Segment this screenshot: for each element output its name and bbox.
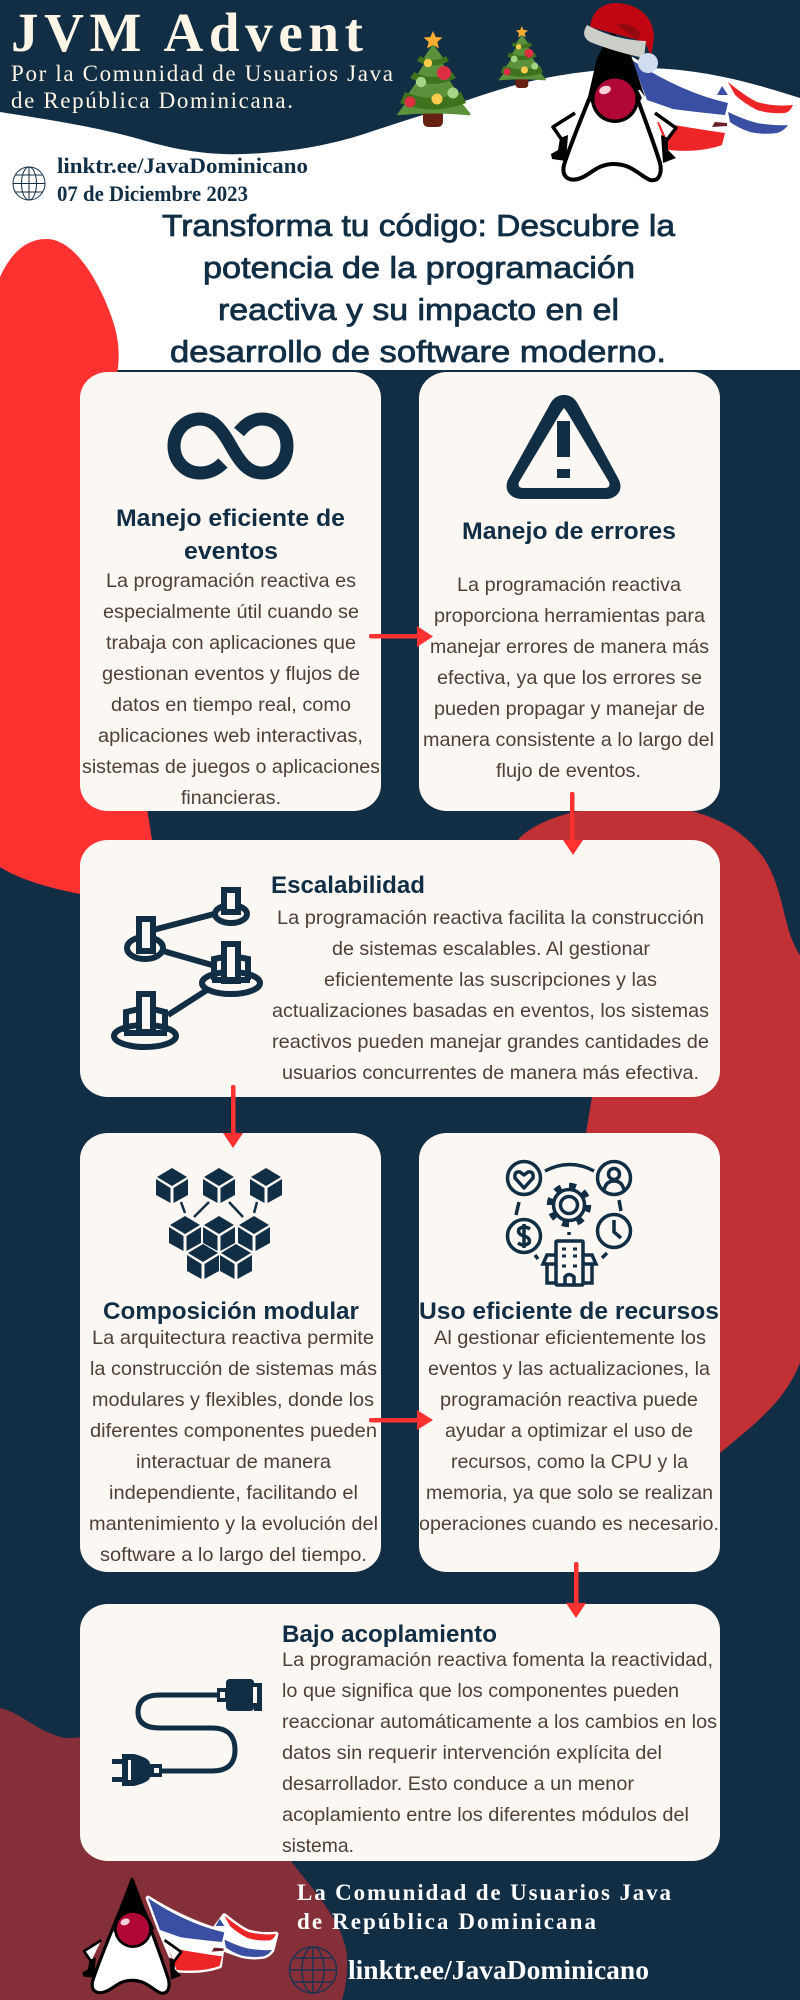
body text: de sistemas escalables. Al gestionar xyxy=(332,938,651,960)
body text: Al gestionar eficientemente los xyxy=(434,1327,706,1349)
icon: globe header xyxy=(13,167,45,200)
body text: lo que significa que los componentes pueden xyxy=(282,1680,679,1702)
footer community text: de República Dominicana xyxy=(297,1909,596,1934)
heading xyxy=(116,505,345,565)
body text: eficientemente las suscripciones y las xyxy=(324,969,657,991)
panel: Manejo de errores xyxy=(419,372,720,811)
panel: Escalabilidad xyxy=(80,840,720,1097)
background blob: maroon bottom-left xyxy=(0,1708,347,2000)
body text: independiente, facilitando el xyxy=(109,1482,358,1504)
body text xyxy=(89,1327,378,1566)
contact info xyxy=(57,153,308,206)
flag xyxy=(632,60,793,151)
body text: mantenimiento y la evolución del xyxy=(89,1513,378,1535)
icon: warning triangle xyxy=(507,395,620,499)
body text: acoplamiento entre los diferentes módulos del xyxy=(282,1804,689,1826)
panel: Bajo acoplamiento xyxy=(80,1604,720,1861)
body text: memoria, ya que solo se realizan xyxy=(426,1482,713,1504)
body text: la construcción de sistemas más xyxy=(90,1358,377,1380)
body text: software a lo largo del tiempo. xyxy=(100,1544,367,1566)
arrow: card 4 to card 5 xyxy=(369,1410,433,1430)
Duke head upper extension xyxy=(588,30,645,97)
subtitle xyxy=(11,61,393,113)
body text: La programación reactiva fomenta la reactividad, xyxy=(282,1649,713,1671)
heading: Composición modular xyxy=(103,1298,359,1325)
footer community text xyxy=(297,1880,672,1934)
body text: operaciones cuando es necesario. xyxy=(419,1513,719,1535)
body text: especialmente útil cuando se xyxy=(103,601,359,623)
subtitle: Por la Comunidad de Usuarios Java xyxy=(11,61,393,86)
body text: ayudar a optimizar el uso de xyxy=(445,1420,693,1442)
heading: eventos xyxy=(184,538,278,565)
contact info: 07 de Diciembre 2023 xyxy=(57,181,248,206)
body text: La programación reactiva es xyxy=(106,570,356,592)
footer community text: La Comunidad de Usuarios Java xyxy=(297,1880,672,1905)
body text: aplicaciones web interactivas, xyxy=(98,725,363,747)
footer link: linktr.ee/JavaDominicano xyxy=(348,1955,649,1985)
icon: resources circle xyxy=(508,1162,630,1285)
heading: Bajo acoplamiento xyxy=(282,1621,497,1648)
panel: Uso eficiente de recursos xyxy=(419,1133,720,1572)
contact info: linktr.ee/JavaDominicano xyxy=(57,153,308,178)
headline xyxy=(162,208,676,369)
body text: datos sin requerir intervención explícita del xyxy=(282,1742,662,1764)
icon: Christmas tree small xyxy=(499,26,546,88)
body text xyxy=(423,574,714,782)
body text: La programación reactiva xyxy=(457,574,681,596)
body text: sistemas de juegos o aplicaciones xyxy=(82,756,380,778)
arrow: card 2 to card 3 xyxy=(563,792,583,855)
icon: Christmas tree large xyxy=(397,31,470,127)
panel: Manejo eficiente de eventos xyxy=(80,372,381,811)
body text: La arquitectura reactiva permite xyxy=(92,1327,374,1349)
body text: La programación reactiva facilita la construcción xyxy=(277,907,704,929)
icon: power cable plug xyxy=(112,1679,262,1786)
headline: reactiva y su impacto en el xyxy=(218,292,619,327)
body text: efectiva, ya que los errores se xyxy=(437,667,702,689)
icon: network of towers xyxy=(114,890,260,1047)
body text: modulares y flexibles, donde los xyxy=(92,1389,374,1411)
arrow: card 1 to card 2 xyxy=(369,626,433,647)
body text: usuarios concurrentes de manera más efectiva. xyxy=(282,1062,699,1084)
main title: JVM Advent: JVM Advent xyxy=(11,2,364,63)
heading: Escalabilidad xyxy=(271,872,425,899)
panel: Composición modular xyxy=(80,1133,381,1572)
Duke xyxy=(82,1879,181,1993)
body text: proporciona herramientas para xyxy=(434,605,705,627)
body text xyxy=(272,907,709,1084)
heading: Uso eficiente de recursos xyxy=(419,1298,719,1325)
icon: infinity xyxy=(174,419,287,473)
background blob: bright red left xyxy=(0,239,155,900)
arrow: card 3 to card 4 xyxy=(223,1085,243,1148)
background blob: dark red right xyxy=(518,805,800,1453)
body text: actualizaciones basadas en eventos, los sistemas xyxy=(272,1000,709,1022)
body text: reactivos pueden manejar grandes cantidades de xyxy=(272,1031,709,1053)
body text: reaccionar automáticamente a los cambios en los xyxy=(282,1711,717,1733)
flag xyxy=(148,1898,276,1971)
body text: gestionan eventos y flujos de xyxy=(102,663,360,685)
body text: diferentes componentes pueden xyxy=(90,1420,377,1442)
body text: manera consistente a lo largo del xyxy=(423,729,714,751)
headline: desarrollo de software moderno. xyxy=(170,334,666,369)
body text: datos en tiempo real, como xyxy=(111,694,351,716)
headline: potencia de la programación xyxy=(203,250,635,285)
body text: desarrollador. Esto conduce a un menor xyxy=(282,1773,635,1795)
nose repaint xyxy=(594,78,636,120)
body text: programación reactiva puede xyxy=(440,1389,698,1411)
body text: manejar errores de manera más xyxy=(430,636,709,658)
body text: interactuar de manera xyxy=(136,1451,331,1473)
heading: Manejo de errores xyxy=(462,518,676,545)
arrow: card 5 to card 6 xyxy=(566,1562,586,1618)
body text xyxy=(82,570,380,809)
body text xyxy=(419,1327,719,1535)
body text: trabaja con aplicaciones que xyxy=(106,632,356,654)
body text: financieras. xyxy=(181,787,281,809)
header white wave xyxy=(0,68,800,370)
headline: Transforma tu código: Descubre la xyxy=(162,208,676,243)
Duke mascot with hat and flag xyxy=(551,3,793,180)
body text: pueden propagar y manejar de xyxy=(434,698,705,720)
body text xyxy=(282,1649,717,1857)
body text: sistema. xyxy=(282,1835,354,1857)
body text: recursos, como la CPU y la xyxy=(451,1451,688,1473)
body text: flujo de eventos. xyxy=(496,760,641,782)
Duke xyxy=(551,36,676,180)
heading: Manejo eficiente de xyxy=(116,505,345,532)
subtitle: de República Dominicana. xyxy=(11,88,293,113)
icon: globe footer xyxy=(290,1947,336,1993)
icon: Santa hat xyxy=(584,3,658,73)
icon: modular cubes xyxy=(156,1168,282,1279)
body text: eventos y las actualizaciones, la xyxy=(428,1358,710,1380)
footer Duke mascot with flag xyxy=(82,1879,276,1993)
